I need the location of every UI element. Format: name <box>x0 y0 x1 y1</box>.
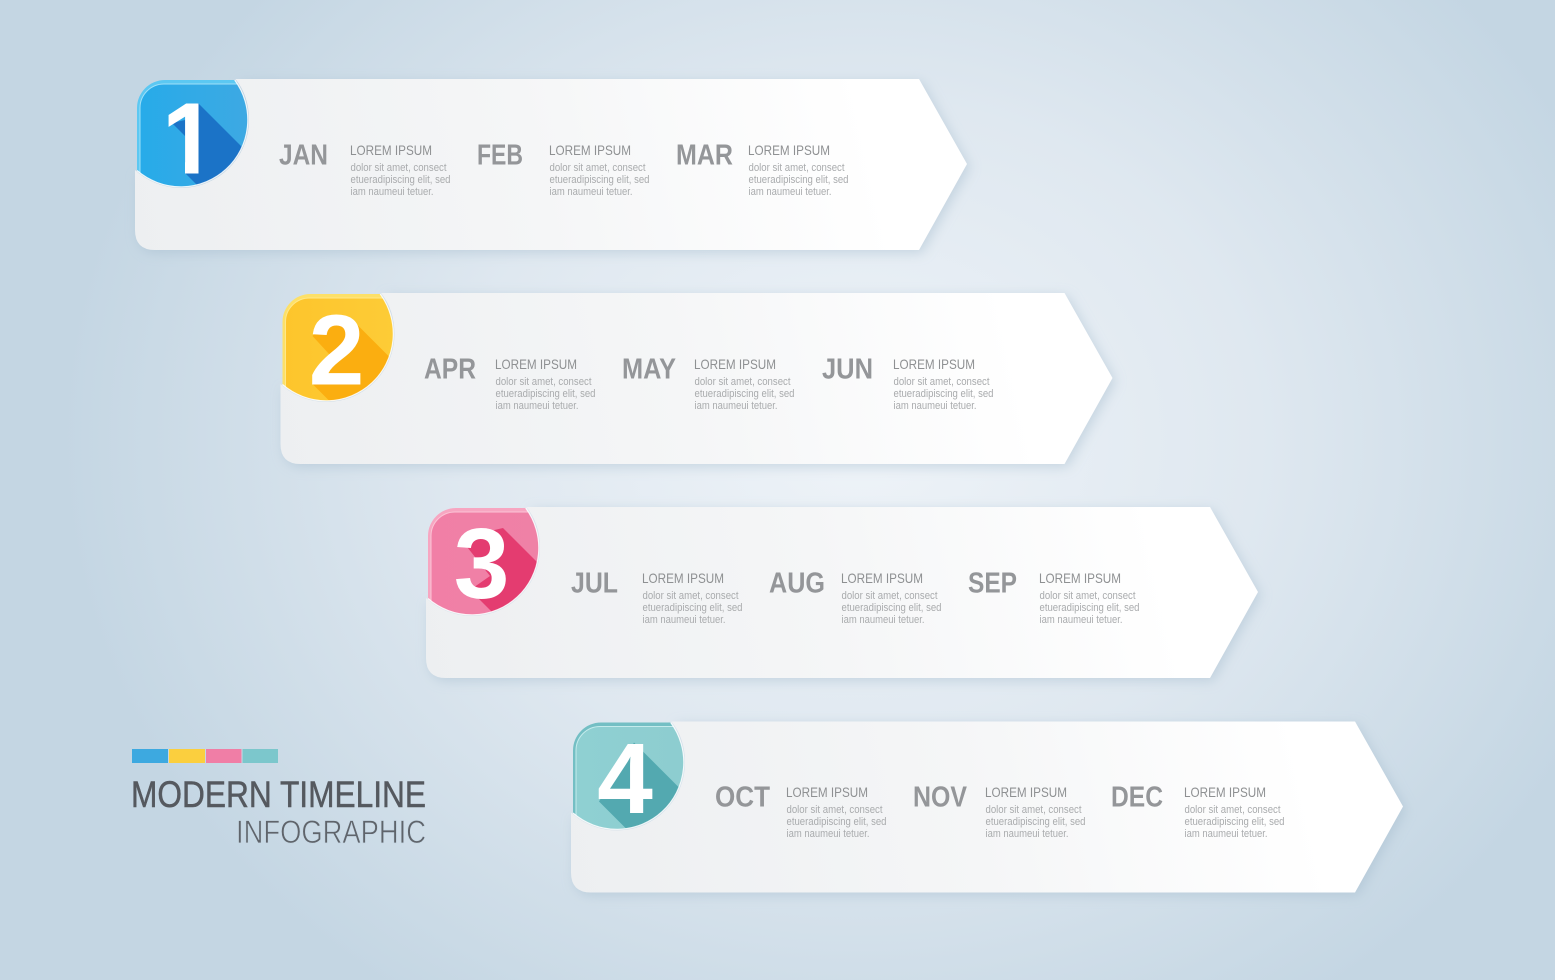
FEB column: FEB <box>477 140 523 172</box>
colour legend strip <box>132 749 278 763</box>
JAN column: JAN <box>279 140 328 172</box>
OCT column: LOREM IPSUM <box>786 784 868 800</box>
JAN column <box>279 140 450 198</box>
APR column: dolor sit amet, consect <box>496 376 592 388</box>
SEP column: dolor sit amet, consect <box>1040 590 1136 602</box>
NOV column: NOV <box>913 782 967 814</box>
AUG column: etueradipiscing elit, sed <box>842 602 942 614</box>
subtitle: INFOGRAPHIC <box>236 814 426 850</box>
card 4: October to December <box>571 722 1403 902</box>
icon: number 3 badge: 3 <box>454 508 509 620</box>
icon: number 3 badge <box>428 508 540 616</box>
card 3 arrow panel <box>426 507 1258 678</box>
JUN column: dolor sit amet, consect <box>894 376 990 388</box>
AUG column: iam naumeui tetuer. <box>842 614 924 626</box>
MAY column: etueradipiscing elit, sed <box>694 388 794 400</box>
JUL column: dolor sit amet, consect <box>642 590 738 602</box>
JUN column: LOREM IPSUM <box>893 356 975 372</box>
card 2 arrow panel <box>280 293 1112 464</box>
JAN column: dolor sit amet, consect <box>350 162 446 174</box>
OCT column: iam naumeui tetuer. <box>786 828 870 840</box>
card 4 arrow panel <box>571 722 1403 892</box>
NOV column: iam naumeui tetuer. <box>986 828 1068 840</box>
NOV column: dolor sit amet, consect <box>986 804 1082 816</box>
MAR column: etueradipiscing elit, sed <box>748 174 848 186</box>
APR column: iam naumeui tetuer. <box>496 400 578 412</box>
icon: number 2 badge <box>282 294 394 402</box>
MAY column: MAY <box>622 354 676 386</box>
DEC column: DEC <box>1111 782 1163 814</box>
JUL column: etueradipiscing elit, sed <box>642 602 742 614</box>
JUN column <box>822 354 994 412</box>
FEB column: etueradipiscing elit, sed <box>550 174 650 186</box>
AUG column: AUG <box>769 568 825 600</box>
MAR column: dolor sit amet, consect <box>748 162 844 174</box>
NOV column: LOREM IPSUM <box>985 784 1067 800</box>
icon: number 1 badge: 1 <box>162 83 218 195</box>
MAY column: LOREM IPSUM <box>694 356 776 372</box>
OCT column: etueradipiscing elit, sed <box>786 816 886 828</box>
DEC column: iam naumeui tetuer. <box>1184 828 1268 840</box>
card 1: January to March <box>135 79 967 273</box>
AUG column: LOREM IPSUM <box>841 570 923 586</box>
MAR column: iam naumeui tetuer. <box>748 186 832 198</box>
FEB column <box>477 140 650 198</box>
SEP column: SEP <box>968 568 1017 600</box>
AUG column: dolor sit amet, consect <box>842 590 938 602</box>
OCT column: OCT <box>715 782 771 814</box>
DEC column: etueradipiscing elit, sed <box>1184 816 1284 828</box>
MAY column <box>622 354 794 412</box>
FEB column: iam naumeui tetuer. <box>550 186 632 198</box>
JUN column: JUN <box>822 354 873 386</box>
DEC column <box>1111 782 1284 840</box>
MAY column: dolor sit amet, consect <box>694 376 790 388</box>
SEP column: etueradipiscing elit, sed <box>1040 602 1140 614</box>
JUN column: etueradipiscing elit, sed <box>894 388 994 400</box>
JAN column: LOREM IPSUM <box>350 142 432 158</box>
MAY column: iam naumeui tetuer. <box>694 400 778 412</box>
JAN column: etueradipiscing elit, sed <box>350 174 450 186</box>
JUN column: iam naumeui tetuer. <box>894 400 976 412</box>
OCT column <box>715 782 886 840</box>
icon: number 4 badge <box>572 722 684 830</box>
title: MODERN TIMELINE <box>131 773 426 815</box>
card 2: April to June <box>280 293 1112 484</box>
MAR column: LOREM IPSUM <box>748 142 830 158</box>
NOV column: etueradipiscing elit, sed <box>986 816 1086 828</box>
APR column: LOREM IPSUM <box>495 356 577 372</box>
icon: number 4 badge: 4 <box>597 723 653 835</box>
APR column <box>424 354 596 412</box>
JAN column: iam naumeui tetuer. <box>350 186 434 198</box>
FEB column: dolor sit amet, consect <box>550 162 646 174</box>
JUL column: JUL <box>571 568 618 600</box>
SEP column: LOREM IPSUM <box>1039 570 1121 586</box>
card 1 arrow panel <box>135 79 967 250</box>
APR column: etueradipiscing elit, sed <box>496 388 596 400</box>
AUG column <box>769 568 942 626</box>
NOV column <box>913 782 1086 840</box>
DEC column: LOREM IPSUM <box>1184 784 1266 800</box>
JUL column: iam naumeui tetuer. <box>642 614 726 626</box>
MAR column <box>676 140 848 198</box>
icon: number 1 badge <box>136 80 248 188</box>
icon: number 2 badge: 2 <box>309 294 364 406</box>
SEP column: iam naumeui tetuer. <box>1040 614 1122 626</box>
JUL column <box>571 568 742 626</box>
FEB column: LOREM IPSUM <box>549 142 631 158</box>
MAR column: MAR <box>676 140 733 172</box>
DEC column: dolor sit amet, consect <box>1184 804 1280 816</box>
JUL column: LOREM IPSUM <box>642 570 724 586</box>
OCT column: dolor sit amet, consect <box>786 804 882 816</box>
APR column: APR <box>424 354 476 386</box>
card 3: July to September <box>426 507 1258 690</box>
SEP column <box>968 568 1140 626</box>
